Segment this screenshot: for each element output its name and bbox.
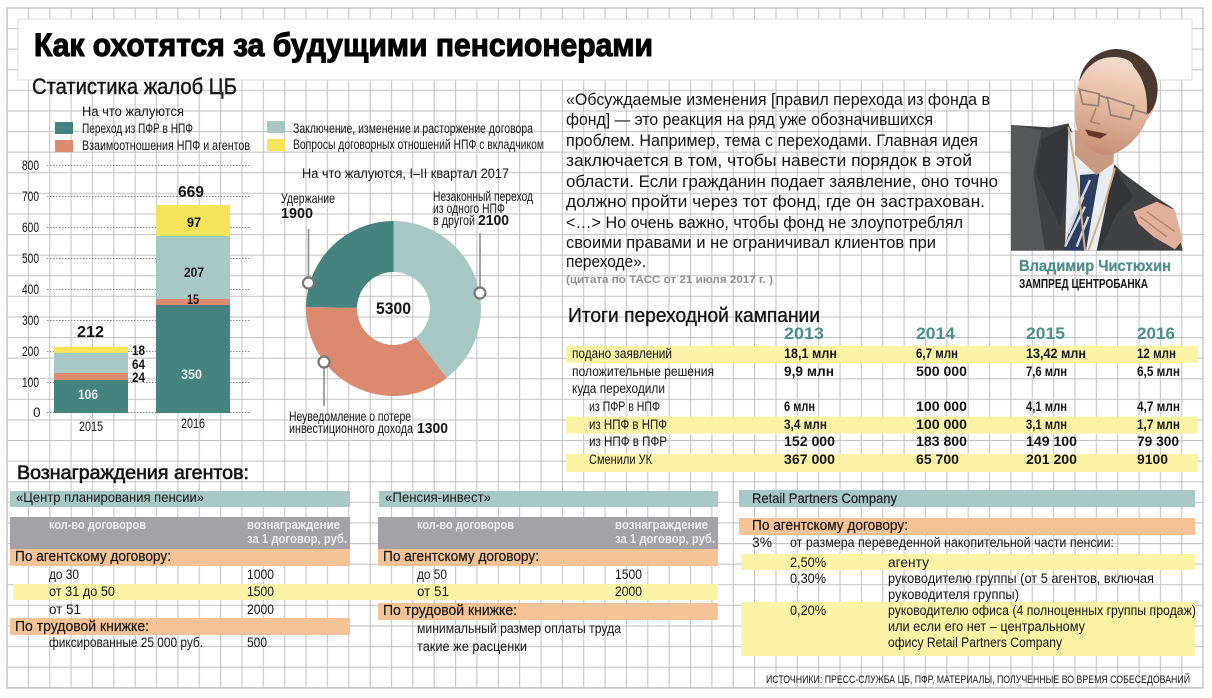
- transition campaign table: [566, 325, 1198, 472]
- donut label: non-notification: Неуведомление о потере: [289, 409, 411, 424]
- year headers: 2013: [784, 325, 824, 343]
- bar 2016: [156, 184, 230, 431]
- row labels: куда переходили: [572, 381, 665, 396]
- table values: 100 000: [916, 398, 967, 414]
- legend: На что жалуются: [82, 104, 184, 119]
- bar 2015: 64: [132, 356, 145, 372]
- portrait caption: ЗАМПРЕД ЦЕНТРОБАНКА: [1019, 277, 1148, 291]
- panel: Retail Partners Company: агенту: [888, 554, 929, 570]
- row labels: из НПФ в НПФ: [589, 417, 667, 432]
- panel: pension invest: [378, 489, 718, 654]
- legend: Взаимоотношения НПФ и агентов: [82, 138, 250, 153]
- bar 2015: 18: [132, 342, 145, 358]
- quote: [566, 91, 998, 271]
- quote: своими правами и не ограничивал клиентов при: [566, 234, 936, 252]
- year headers: 2015: [1026, 325, 1065, 343]
- panel: pension planning centre: 500: [247, 634, 267, 650]
- row labels: [572, 346, 714, 467]
- donut chart title: На что жалуются, I–II квартал 2017: [302, 166, 509, 181]
- stacked bar chart: 100: [22, 375, 39, 390]
- donut label: non-notification: инвестиционного дохода: [289, 421, 413, 436]
- lanyard: [1068, 127, 1115, 251]
- year headers: 2014: [916, 325, 956, 343]
- panel: pension invest: до 50: [417, 566, 447, 582]
- bar 2016: 97: [187, 214, 201, 230]
- quote: заключается в том, чтобы навести порядок в этой: [566, 152, 972, 170]
- panel: Retail Partners Company: руководителю группы (от 5 агентов, включая: [888, 570, 1154, 586]
- stacked bar chart: 300: [22, 313, 39, 328]
- panel: Retail Partners Company: руководителя группы): [888, 586, 1019, 602]
- heading: transition campaign results: Итоги переходной кампании: [568, 305, 820, 327]
- table values: 7,6 млн: [1026, 363, 1067, 379]
- nose shadow: [1091, 108, 1100, 124]
- year headers: [784, 325, 1175, 343]
- quote: проблем. Например, тема с переходами. Главная идея: [566, 132, 978, 150]
- legend: Переход из ПФР в НПФ: [82, 121, 193, 136]
- bar 2015: [54, 324, 145, 434]
- panel: pension invest: По агентскому договору:: [383, 549, 539, 565]
- table header: [10, 517, 350, 549]
- table values: 65 700: [916, 451, 959, 467]
- hair: [1079, 49, 1158, 115]
- table values: 6,5 млн: [1137, 363, 1180, 379]
- panel: pension invest: от 51: [417, 583, 449, 599]
- row labels: положительные решения: [572, 364, 714, 379]
- panel: pension planning centre: 1000: [247, 566, 274, 582]
- donut label: illegal transfer: из одного НПФ: [433, 201, 505, 216]
- table values: 500 000: [916, 363, 967, 379]
- marker: non-notification: [318, 356, 330, 406]
- table values: 6,7 млн: [916, 345, 958, 361]
- mouth: [1085, 129, 1107, 139]
- panel: pension invest: «Пенсия-инвест»: [385, 489, 491, 505]
- donut chart: [303, 221, 486, 406]
- panel: Retail Partners Company: от размера переведенной накопительной части пенсии:: [790, 534, 1114, 550]
- donut label: non-notification: 1300: [417, 420, 448, 437]
- bar 2015: 24: [132, 369, 145, 385]
- bar 2015: 212: [77, 324, 104, 341]
- panel: pension planning centre: По трудовой книжке:: [15, 619, 149, 635]
- panel: pension invest: По трудовой книжке:: [383, 603, 517, 619]
- table header: вознаграждение: [615, 517, 708, 532]
- donut label: retention: 1900: [281, 205, 313, 222]
- table values: 367 000: [784, 451, 835, 467]
- panel: Retail Partners Company: офису Retail Partners Company: [888, 634, 1062, 650]
- table header: за 1 договор, руб.: [247, 531, 347, 546]
- heading: CB complaint statistics: Статистика жалоб ЦБ: [32, 74, 237, 99]
- panel: pension planning centre: 1500: [247, 583, 274, 599]
- table values: 13,42 млн: [1026, 345, 1086, 361]
- panel: pension planning centre: [10, 489, 350, 650]
- table header: [378, 517, 718, 549]
- panel: pension invest: такие же расценки: [417, 638, 527, 654]
- shared yellow row across first two tables: [13, 584, 718, 600]
- panel: pension invest: 2000: [615, 583, 642, 599]
- bar 2015: 2015: [79, 419, 103, 434]
- year headers: 2016: [1137, 325, 1175, 343]
- glasses: [1079, 89, 1148, 119]
- table values: 201 200: [1026, 451, 1077, 467]
- table header: за 1 договор, руб.: [615, 531, 715, 546]
- table values: 4,7 млн: [1137, 398, 1180, 414]
- table values: 79 300: [1137, 433, 1179, 449]
- stacked bar chart: 400: [22, 282, 39, 297]
- panel: pension planning centre: «Центр планирования пенсии»: [16, 489, 204, 505]
- quote: фонд] — это реакция на ряд уже обозначившихся: [566, 111, 933, 129]
- donut label: illegal transfer: 2100: [478, 212, 509, 229]
- table values: 9,9 млн: [784, 363, 834, 379]
- shirt: [1065, 130, 1115, 251]
- row labels: из ПФР в НПФ: [589, 399, 660, 414]
- table values: 4,1 млн: [1026, 398, 1067, 414]
- donut label: illegal transfer: Незаконный переход: [433, 189, 533, 204]
- table values: 9100: [1137, 451, 1168, 467]
- panel: Retail Partners Company: По агентскому договору:: [752, 518, 908, 534]
- panel: pension planning centre: до 30: [49, 566, 79, 582]
- bar 2016: 207: [184, 264, 204, 280]
- table values: 3,1 млн: [1026, 416, 1067, 432]
- quote citation: (цитата по ТАСС от 21 июля 2017 г. ): [566, 274, 773, 286]
- panel: pension invest: 1500: [615, 566, 642, 582]
- stacked bar chart: 500: [22, 251, 39, 266]
- heading: agent rewards: Вознаграждения агентов:: [17, 463, 249, 484]
- table values: 183 800: [916, 433, 967, 449]
- panel: Retail Partners Company: 3%: [752, 534, 772, 550]
- quote: «Обсуждаемые изменения [правил перехода из фонда в: [566, 91, 990, 109]
- stacked bar chart: [22, 158, 251, 434]
- neck: [1075, 130, 1115, 175]
- stacked bar chart: 0: [33, 405, 41, 420]
- stacked bar chart: 600: [22, 220, 39, 235]
- panel: Retail Partners Company: или если его нет – центральному: [888, 618, 1085, 634]
- panel: Retail Partners Company: 2,50%: [790, 554, 826, 570]
- legend: Заключение, изменение и расторжение договора: [293, 121, 533, 136]
- table header: кол-во договоров: [417, 517, 514, 532]
- panel: Retail Partners Company: Retail Partners Company: [752, 490, 897, 506]
- portrait caption: [1019, 258, 1171, 291]
- donut total: 5300: [376, 300, 411, 318]
- table values: 18,1 млн: [784, 345, 837, 361]
- bar 2016: 15: [187, 291, 199, 307]
- panel: pension planning centre: По агентскому договору:: [15, 549, 171, 565]
- legend: Вопросы договорных отношений НПФ с вкладчиком: [293, 137, 544, 152]
- panel: pension planning centre: фиксированные 25 000 руб.: [49, 634, 203, 650]
- bar 2015: 106: [78, 386, 98, 402]
- bar 2016: 669: [178, 184, 204, 201]
- table values: 3,4 млн: [784, 416, 827, 432]
- panel: pension planning centre: 2000: [247, 601, 274, 617]
- hand: [1133, 202, 1183, 249]
- bar 2016: 2016: [181, 416, 205, 431]
- panel: Retail Partners Company: 0,20%: [790, 602, 826, 618]
- quote: должно пройти через тот фонд, где он застрахован.: [566, 193, 985, 211]
- row labels: подано заявлений: [572, 346, 672, 361]
- table values: 152 000: [784, 433, 835, 449]
- table values: 1,7 млн: [1137, 416, 1180, 432]
- bar 2016: 350: [181, 366, 202, 382]
- table values: 149 100: [1026, 433, 1077, 449]
- portrait caption: Владимир Чистюхин: [1019, 258, 1171, 275]
- marker: retention: [303, 229, 314, 288]
- jacket: [1011, 123, 1183, 251]
- stacked bar chart: 700: [22, 189, 39, 204]
- table values: 12 млн: [1137, 345, 1176, 361]
- panel: pension planning centre: от 31 до 50: [49, 583, 115, 599]
- quote: <…> Но очень важно, чтобы фонд не злоупотреблял: [566, 214, 963, 232]
- table header: кол-во договоров: [49, 517, 146, 532]
- head: [1075, 49, 1157, 155]
- table header: вознаграждение: [247, 517, 340, 532]
- row labels: Сменили УК: [589, 452, 652, 467]
- donut label: non-notification: [289, 409, 448, 437]
- panel: Retail Partners Company: [739, 490, 1196, 656]
- donut label: retention: Удержание: [281, 191, 335, 206]
- quote: области. Если гражданин подает заявление, оно точно: [566, 173, 998, 191]
- portrait photo: [1011, 49, 1183, 251]
- row labels: из НПФ в ПФР: [589, 434, 667, 449]
- marker: illegal transfer: [474, 233, 486, 298]
- legend: [55, 104, 544, 153]
- quote: переходе».: [566, 253, 646, 271]
- donut label: illegal transfer: [433, 189, 533, 229]
- donut label: retention: [281, 191, 335, 222]
- panel: pension invest: минимальный размер оплаты труда: [417, 620, 621, 636]
- table values: 6 млн: [784, 398, 815, 414]
- stacked bar chart: 200: [22, 344, 39, 359]
- panel: pension planning centre: от 51: [49, 601, 81, 617]
- title panel: [18, 19, 1192, 80]
- tie: [1063, 173, 1099, 251]
- table values: [784, 345, 1180, 467]
- table values: 100 000: [916, 416, 967, 432]
- panel: Retail Partners Company: 0,30%: [790, 570, 826, 586]
- title: Как охотятся за будущими пенсионерами: [34, 27, 653, 63]
- donut label: illegal transfer: в другой: [433, 213, 475, 228]
- stacked bar chart: 800: [22, 158, 39, 173]
